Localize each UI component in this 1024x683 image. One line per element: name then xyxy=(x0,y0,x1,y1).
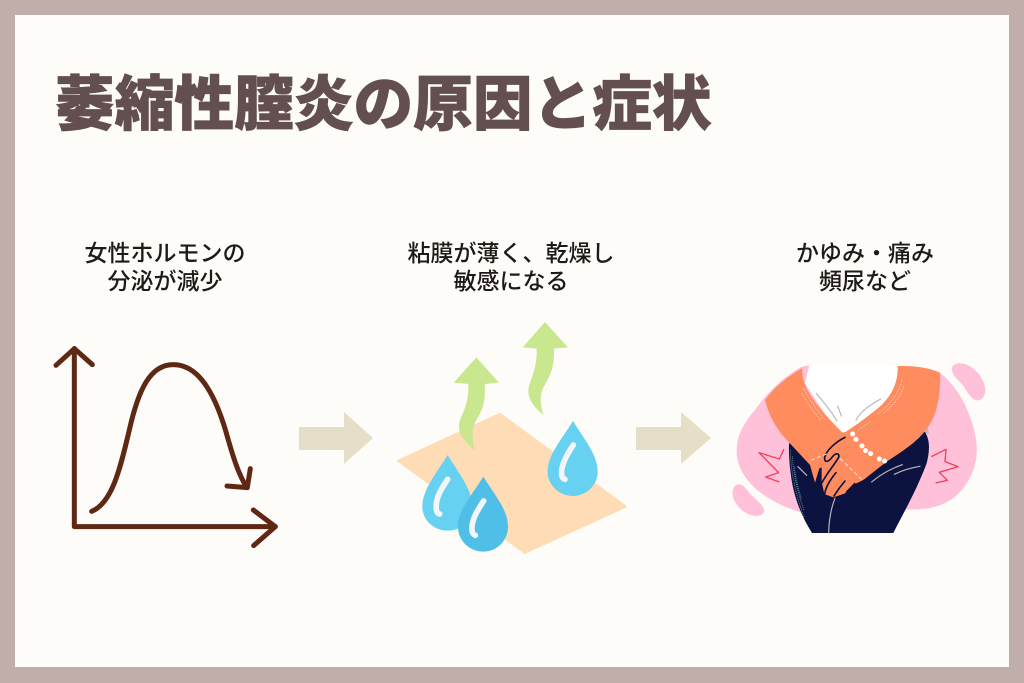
seam dashes xyxy=(811,453,862,479)
chart: hormone decline curve xyxy=(56,349,275,546)
pain mark right xyxy=(931,449,958,483)
text: mucosa label: 粘膜が薄く、乾燥し xyxy=(408,240,614,266)
arrow: second step xyxy=(636,412,711,464)
pink blob top right xyxy=(952,363,985,400)
waistband xyxy=(839,426,929,437)
arrow: first step xyxy=(299,412,373,464)
pink blob behind body xyxy=(737,365,977,513)
illustration: dry mucosa with drops xyxy=(397,322,627,554)
sleeves and hands xyxy=(765,366,940,497)
navy trousers xyxy=(789,432,929,533)
rising arrow left xyxy=(454,357,499,450)
illustration: pelvic discomfort figure xyxy=(733,363,985,533)
text: cause label: 女性ホルモンの xyxy=(84,240,246,266)
white shirt xyxy=(805,363,903,435)
finger outlines xyxy=(822,437,855,496)
text: mucosa label xyxy=(408,240,614,294)
drop highlights xyxy=(436,445,573,535)
text: mucosa label: 敏感になる xyxy=(454,268,568,294)
water drop centre xyxy=(458,477,508,552)
trouser speckle xyxy=(790,450,804,517)
title: 萎縮性膣炎の原因と症状 xyxy=(55,71,712,138)
text: symptoms label: かゆみ・痛み xyxy=(796,240,934,266)
text: cause label xyxy=(84,240,246,294)
text: symptoms label: 頻尿など xyxy=(819,268,911,294)
text: cause label: 分泌が減少 xyxy=(108,268,222,294)
pearl bracelet xyxy=(850,431,887,463)
pain mark left xyxy=(759,449,784,482)
sleeve speckle xyxy=(802,380,904,430)
clothing creases xyxy=(798,393,920,533)
text: symptoms label xyxy=(796,240,934,294)
rising arrow right xyxy=(523,322,568,415)
water drop right xyxy=(548,421,598,496)
pink blob bottom left xyxy=(733,484,764,516)
mucosa sheet xyxy=(397,413,627,554)
water drop left xyxy=(422,455,472,531)
